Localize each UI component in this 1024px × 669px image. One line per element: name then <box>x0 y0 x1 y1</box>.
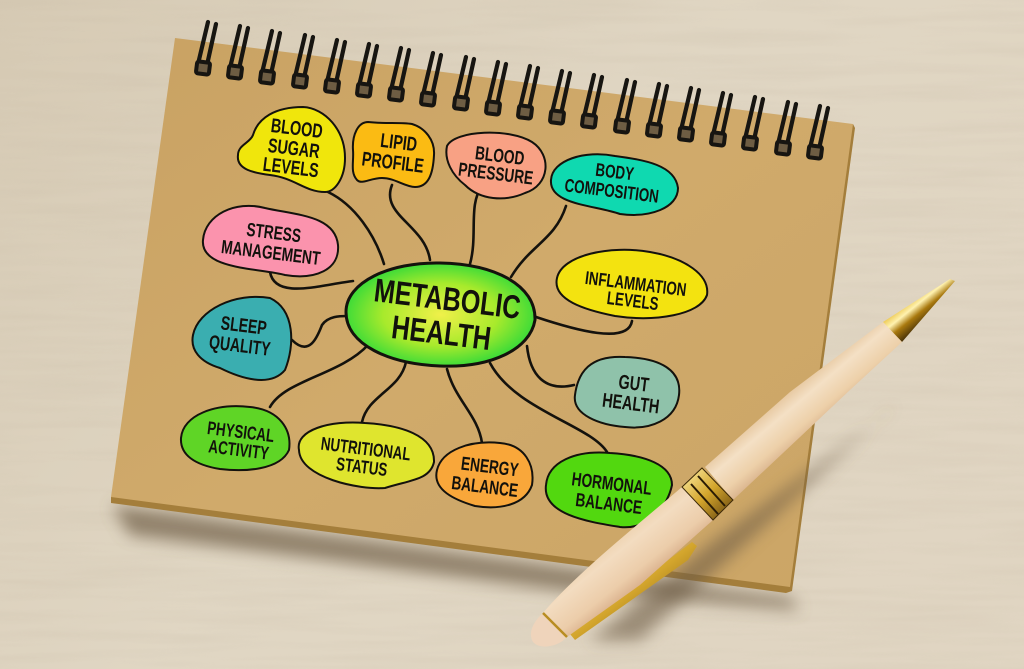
node: Inflammation Levels <box>556 250 707 318</box>
pen shadow <box>590 400 900 640</box>
node: Blood Sugar Levels: SUGAR <box>267 134 321 163</box>
pen end cap <box>531 613 567 647</box>
node: Gut Health: GUT <box>617 370 651 396</box>
node: Physical Activity <box>181 406 289 470</box>
node: Lipid Profile: PROFILE <box>361 147 425 177</box>
pen clip <box>570 542 697 640</box>
node: Hormonal Balance <box>546 453 672 527</box>
spiral binding <box>196 22 828 159</box>
node: Sleep Quality <box>192 297 291 380</box>
node: Stress Management: STRESS <box>245 219 302 247</box>
node: Blood Sugar Levels: BLOOD <box>270 114 324 143</box>
notebook page edge <box>111 124 855 593</box>
node: Hormonal Balance: BALANCE <box>574 489 643 519</box>
central node: Metabolic Health <box>346 263 535 366</box>
node: Blood Pressure: PRESSURE <box>457 158 534 189</box>
pen gold band <box>682 468 733 520</box>
node: Sleep Quality: QUALITY <box>208 331 272 360</box>
node: Nutritional Status: NUTRITIONAL <box>320 434 412 465</box>
node: Body Composition <box>551 154 678 215</box>
node: Nutritional Status: STATUS <box>335 454 389 481</box>
central node: Metabolic Health: METABOLIC <box>372 272 523 327</box>
node: Lipid Profile: LIPID <box>379 129 418 156</box>
node: Blood Sugar Levels: LEVELS <box>262 152 320 182</box>
central node: Metabolic Health: HEALTH <box>390 309 493 358</box>
pen lower barrel <box>543 487 713 637</box>
node: Body Composition: BODY <box>594 160 635 185</box>
mind map connectors <box>270 185 632 452</box>
pen tip <box>883 279 955 342</box>
pen <box>531 279 955 647</box>
node: Blood Pressure <box>446 133 546 198</box>
node: Lipid Profile <box>353 122 434 187</box>
node: Physical Activity: PHYSICAL <box>206 418 275 447</box>
node: Nutritional Status <box>299 422 434 488</box>
node: Energy Balance: BALANCE <box>450 472 519 502</box>
notebook shadow <box>112 505 800 610</box>
node: Sleep Quality: SLEEP <box>220 312 268 339</box>
node: Stress Management: MANAGEMENT <box>220 236 321 270</box>
node: Energy Balance <box>436 442 533 507</box>
node: Hormonal Balance: HORMONAL <box>570 468 653 499</box>
node: Inflammation Levels: INFLAMMATION <box>584 268 687 301</box>
node: Physical Activity: ACTIVITY <box>207 436 270 464</box>
node: Gut Health <box>575 357 679 428</box>
node: Inflammation Levels: LEVELS <box>606 288 660 315</box>
notebook cover <box>111 38 853 587</box>
node: Gut Health: HEALTH <box>601 388 661 418</box>
pen upper barrel <box>705 322 902 500</box>
node: Energy Balance: ENERGY <box>460 452 520 481</box>
node: Blood Sugar Levels <box>238 107 345 192</box>
node: Body Composition: COMPOSITION <box>563 175 660 207</box>
node: Stress Management <box>203 206 338 276</box>
node: Blood Pressure: BLOOD <box>474 142 526 170</box>
notebook <box>111 38 855 610</box>
